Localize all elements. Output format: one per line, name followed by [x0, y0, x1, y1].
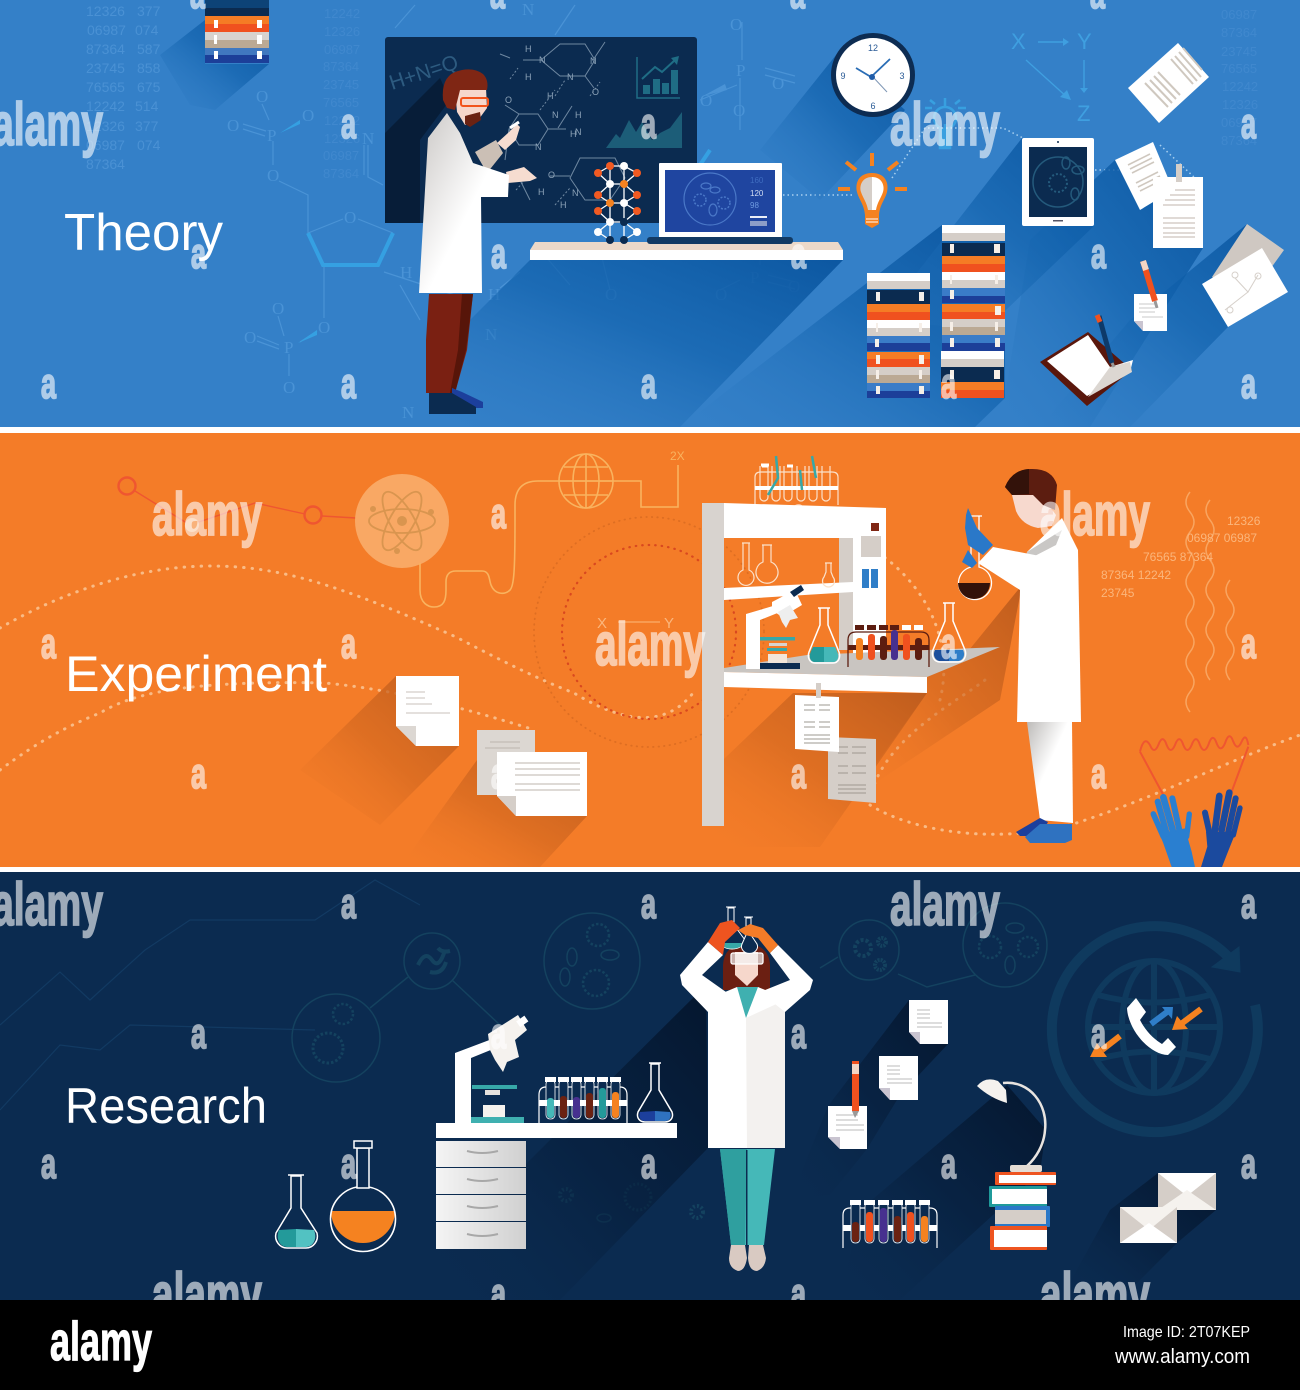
chemical structure background: N — [522, 0, 534, 19]
number columns: 87364 — [86, 41, 125, 57]
number columns: 587 — [137, 41, 161, 57]
panel: theory — [0, 0, 1300, 427]
chemical structure background: P — [284, 338, 293, 357]
number columns: 377 — [135, 118, 159, 134]
blackboard: N — [552, 110, 558, 120]
hood shadows — [702, 585, 1022, 847]
watermarks: a — [641, 880, 657, 928]
paper shadows — [300, 676, 587, 867]
number columns: 87364 — [323, 166, 359, 181]
number columns: 675 — [137, 79, 161, 95]
watermarks: a — [41, 620, 57, 668]
shoes — [429, 388, 483, 414]
title: Experiment: Experiment — [65, 646, 327, 702]
blackboard: N — [567, 72, 574, 82]
watermarks: a — [491, 1010, 507, 1058]
far arm — [475, 140, 503, 169]
watermarks: a — [1091, 1010, 1107, 1058]
watermarks: a — [791, 1010, 807, 1058]
watermarks: a — [641, 360, 657, 408]
number columns: 76565 — [86, 79, 125, 95]
note C with pencil — [828, 1061, 867, 1149]
watermarks: alamy — [595, 611, 705, 678]
watermarks: a — [941, 360, 957, 408]
watermarks: a — [341, 880, 357, 928]
dotted rings — [534, 517, 764, 747]
chemical structure background: O — [344, 208, 356, 227]
desk lamp — [977, 1079, 1045, 1172]
tablet — [1022, 138, 1094, 226]
trousers — [1027, 722, 1073, 823]
long shadows — [430, 985, 1216, 1300]
laptop: 98 — [750, 201, 759, 210]
lab coat — [708, 987, 785, 1148]
title: Research: Research — [65, 1078, 267, 1134]
laptop: 120 — [750, 189, 764, 198]
laptop — [647, 163, 793, 244]
watermarks: a — [791, 230, 807, 278]
icon: hands and wave — [1140, 736, 1248, 867]
blackboard: O — [592, 87, 599, 97]
watermarks: a — [641, 1140, 657, 1188]
drawers — [436, 1141, 526, 1249]
book stack top-left — [205, 0, 269, 63]
chemical structure background: N — [362, 129, 374, 148]
image id: Image ID: 2T07KEP — [1123, 1324, 1250, 1341]
number columns: 12242 — [324, 113, 360, 128]
theory background — [0, 0, 1300, 427]
chemical structure background: O — [700, 91, 712, 110]
microscope — [455, 1015, 528, 1123]
hood controls — [861, 523, 881, 588]
gloves — [708, 920, 778, 955]
chemical structure background: O — [733, 101, 745, 120]
chemical structure background: O — [272, 299, 284, 318]
book stack one — [867, 273, 930, 398]
chemical structure background: N — [485, 325, 497, 344]
trousers — [720, 1149, 775, 1245]
icon: light bulb — [838, 153, 907, 228]
xyz diagram — [1012, 34, 1091, 121]
teal flask — [808, 608, 840, 663]
number block — [597, 514, 1261, 632]
number columns: 87364 — [1221, 25, 1257, 40]
icon: area chart on board — [606, 112, 682, 148]
chemical structure background: O — [227, 116, 239, 135]
watermarks: a — [641, 100, 657, 148]
chemical structure background: P — [267, 126, 276, 145]
panel: experiment — [0, 433, 1300, 867]
face — [735, 952, 758, 986]
number block: 76565 87364 — [1143, 550, 1213, 564]
paper: rotated sheet — [1128, 43, 1209, 123]
number columns: 12326 — [324, 24, 360, 39]
blackboard: O — [505, 95, 512, 105]
watermarks: alamy — [1040, 481, 1150, 548]
molecule model — [594, 162, 641, 244]
number columns: 23745 — [1221, 44, 1257, 59]
blackboard: H — [575, 110, 582, 120]
watermarks: a — [191, 230, 207, 278]
number columns: 858 — [137, 60, 161, 76]
title: Theory: Theory — [64, 204, 223, 262]
watermarks: alamy — [890, 871, 1000, 938]
blackboard: N — [590, 56, 596, 66]
watermarks: a — [41, 360, 57, 408]
chemical structure background: O — [730, 15, 742, 34]
number columns — [86, 3, 1258, 181]
number columns: 06987 — [323, 148, 359, 163]
dotted curves — [0, 556, 1300, 836]
watermarks: a — [341, 100, 357, 148]
trousers — [426, 294, 473, 393]
lab coat — [1017, 518, 1081, 722]
panel: research — [0, 872, 1300, 1300]
clock: 12 — [868, 43, 878, 53]
xyz diagram: Y — [1077, 29, 1092, 54]
shelf — [530, 242, 843, 260]
chemical structure background: O — [715, 285, 727, 304]
microbe circles network — [292, 903, 1047, 1222]
number columns: 12326 — [324, 131, 360, 146]
blackboard: H — [560, 200, 566, 210]
paper: clipped notes — [1115, 142, 1203, 248]
chemical structure background: P — [736, 61, 745, 80]
number columns: 12242 — [1222, 79, 1258, 94]
number columns: 12242 — [324, 6, 360, 21]
blackboard: H — [547, 91, 554, 101]
watermarks: a — [1241, 880, 1257, 928]
number columns: 074 — [135, 22, 159, 38]
blackboard: O — [548, 170, 555, 180]
number columns: 074 — [137, 137, 161, 153]
watermarks: alamy — [152, 1261, 262, 1328]
icon: bar chart on board — [637, 56, 680, 98]
number columns: 12326 — [86, 118, 125, 134]
watermarks: a — [491, 490, 507, 538]
watermarks: a — [491, 750, 507, 798]
icon: envelopes — [1120, 1173, 1216, 1243]
chemical structure background: O — [318, 318, 330, 337]
laptop: 160 — [750, 176, 764, 185]
watermarks: a — [791, 750, 807, 798]
number columns: 06987 — [1221, 7, 1257, 22]
clock — [831, 33, 915, 117]
connector path and globe: 2X — [670, 449, 685, 463]
blue flask — [932, 603, 966, 662]
note B — [879, 1056, 918, 1100]
hanging papers — [795, 683, 876, 803]
chemical structure background: O — [788, 277, 800, 296]
scientist: theory — [419, 69, 537, 414]
hood frame — [724, 503, 886, 670]
watermarks: a — [791, 1270, 807, 1318]
chemical structure background: N — [402, 403, 414, 422]
chemical structure background: H — [488, 285, 500, 304]
feet — [729, 1245, 766, 1271]
chemical structure background: O — [244, 328, 256, 347]
watermarks: a — [1091, 750, 1107, 798]
icon: atom — [355, 474, 449, 568]
watermarks: a — [791, 490, 807, 538]
note two — [477, 730, 535, 795]
blackboard: N — [575, 127, 582, 137]
number columns: 87364 — [1221, 133, 1257, 148]
chemical structure background: O — [772, 74, 784, 93]
test tube rack small — [843, 1200, 937, 1248]
icon: globe with ring — [1052, 926, 1258, 1132]
bench — [724, 647, 1000, 677]
clock: 3 — [899, 71, 905, 81]
number block: 06987 06987 — [1187, 531, 1257, 545]
chemical structure background: O — [283, 378, 295, 397]
number columns: 23745 — [323, 77, 359, 92]
fume hood — [702, 456, 1000, 826]
blackboard: N — [572, 188, 578, 198]
small flask — [276, 1175, 317, 1248]
experiment background — [0, 433, 1300, 867]
blackboard: H — [525, 44, 532, 54]
zigzag chart lines — [0, 880, 420, 1110]
book stack two — [941, 225, 1005, 398]
number columns: 87364 — [323, 59, 359, 74]
flask and gloves — [958, 508, 993, 600]
flasks — [719, 907, 758, 953]
goggles — [731, 953, 763, 964]
website: www.alamy.com — [1114, 1346, 1250, 1368]
number block: 87364 12242 — [1101, 568, 1171, 582]
blackboard — [385, 37, 697, 223]
paper: diagram sheets — [1202, 224, 1288, 327]
raised arms — [680, 942, 813, 1012]
watermarks: alamy — [890, 91, 1000, 158]
microscope — [746, 585, 804, 669]
footer logo: alamy — [50, 1310, 152, 1372]
watermarks: a — [941, 1140, 957, 1188]
number columns: 23745 — [86, 60, 125, 76]
number block: Y — [664, 615, 674, 632]
number columns: 06987 — [1221, 115, 1257, 130]
notebook with pen — [1040, 315, 1133, 406]
icon: phone with arrows — [1090, 998, 1201, 1057]
test tube rack — [539, 1077, 627, 1123]
number columns: 06987 — [87, 22, 126, 38]
note three — [497, 752, 587, 816]
chemical structure background: P — [750, 268, 759, 287]
number columns: 06987 — [324, 42, 360, 57]
note one — [396, 676, 459, 746]
hands — [497, 124, 537, 183]
book pile — [989, 1172, 1056, 1250]
outline flasks — [738, 543, 835, 587]
watermarks: a — [1241, 1140, 1257, 1188]
head — [443, 69, 488, 127]
clock: 9 — [840, 71, 846, 81]
connector path and globe — [420, 449, 685, 607]
chemical structure background: O — [256, 87, 268, 106]
blackboard: H — [570, 129, 576, 139]
clock: 6 — [870, 101, 876, 111]
lab coat — [419, 113, 509, 293]
watermarks: a — [491, 1270, 507, 1318]
watermarks: a — [341, 1140, 357, 1188]
watermarks: a — [341, 620, 357, 668]
number columns: 377 — [137, 3, 161, 19]
chemical structure background — [227, 0, 800, 422]
note A — [909, 1000, 948, 1044]
watermarks: a — [191, 750, 207, 798]
watermarks: a — [1241, 620, 1257, 668]
network line — [118, 478, 356, 532]
hair — [723, 943, 770, 990]
number block: X — [597, 615, 607, 632]
blackboard: N — [535, 142, 542, 152]
scientist: research — [680, 907, 813, 1271]
formula and wavy lines — [618, 492, 1234, 712]
icon: test tubes on hood — [755, 456, 838, 505]
footer bar — [0, 1300, 1300, 1390]
watermarks: alamy — [152, 481, 262, 548]
number block: 23745 — [1101, 586, 1135, 600]
watermarks: a — [1091, 230, 1107, 278]
watermarks: a — [491, 230, 507, 278]
number block: 12326 — [1227, 514, 1261, 528]
number columns: 12326 — [1222, 97, 1258, 112]
watermarks: a — [341, 360, 357, 408]
chemical structure background: O — [302, 106, 314, 125]
blackboard: H+N=Q — [386, 51, 461, 95]
blackboard: N — [539, 55, 546, 65]
blackboard: H — [538, 187, 544, 197]
chemical structure background: O — [267, 166, 279, 185]
test tube rack — [848, 625, 929, 667]
head — [1005, 469, 1057, 528]
desk — [436, 1015, 677, 1249]
number columns: 12326 — [86, 3, 125, 19]
number columns: 76565 — [323, 95, 359, 110]
note with pencil — [1134, 261, 1167, 331]
watermarks: a — [941, 620, 957, 668]
chemical structure background: O — [605, 285, 617, 304]
xyz diagram: Z — [1077, 101, 1090, 126]
watermarks: alamy — [1040, 1261, 1150, 1328]
blue flask — [637, 1063, 673, 1122]
number columns: 06987 — [86, 137, 125, 153]
watermarks: a — [1241, 360, 1257, 408]
number columns: 514 — [135, 98, 159, 114]
number columns: 76565 — [1221, 61, 1257, 76]
faint light bulb — [925, 98, 966, 148]
watermarks: a — [191, 1010, 207, 1058]
chemical structure background: H — [400, 263, 412, 282]
dotted connector lines — [783, 128, 1195, 195]
number columns: 12242 — [86, 98, 125, 114]
watermarks: a — [41, 1140, 57, 1188]
scientist: experiment — [958, 469, 1081, 843]
xyz diagram: X — [1011, 29, 1026, 54]
long shadows — [160, 20, 1288, 427]
shoes — [1016, 818, 1072, 843]
number columns: 87364 — [86, 156, 125, 172]
research background — [0, 872, 1300, 1300]
blackboard: H — [525, 72, 532, 82]
round flask — [330, 1141, 396, 1252]
watermarks: a — [1241, 100, 1257, 148]
